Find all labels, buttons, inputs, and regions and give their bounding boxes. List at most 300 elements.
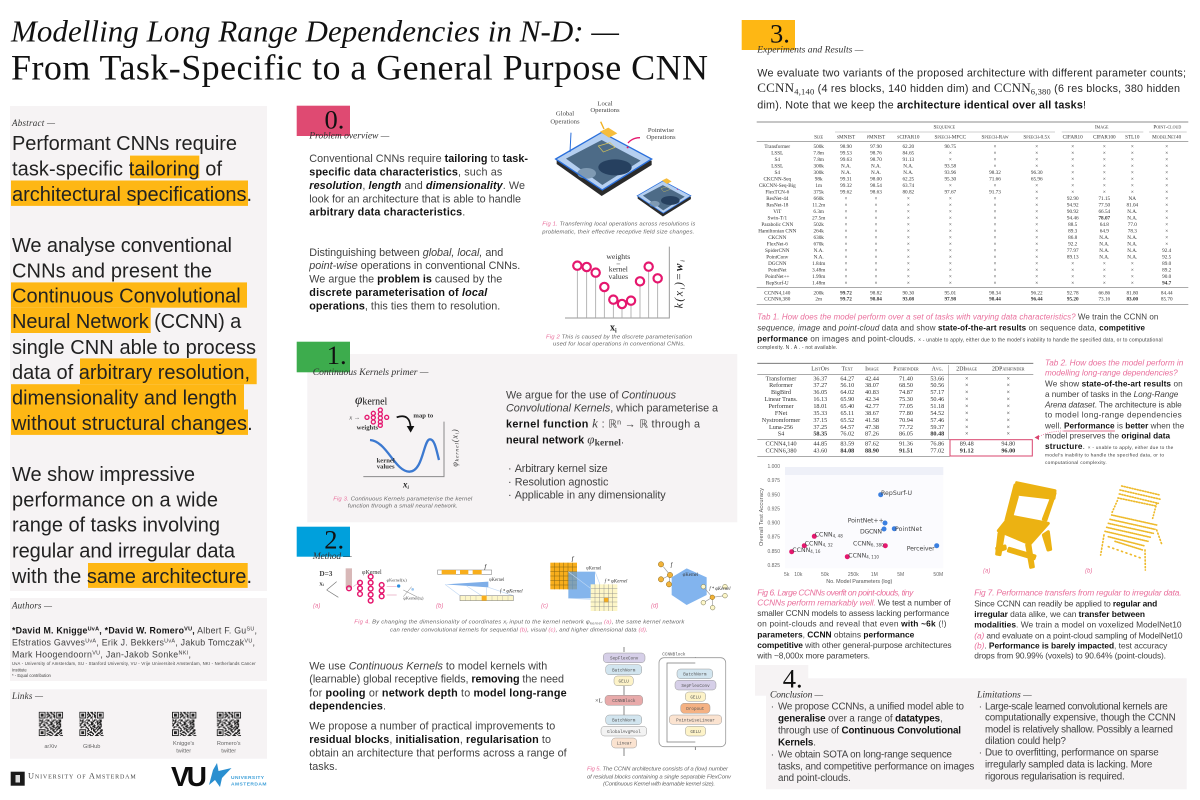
table 1 rows: 500k bbox=[814, 144, 824, 150]
table 1 CCNN rows: CCNN6,380 bbox=[764, 297, 791, 303]
figure 6 caption: competitive with other general-purpose architectures bbox=[757, 640, 952, 650]
figure 3: kernel network diagram: i bbox=[455, 432, 460, 434]
figure 4 panel letters bbox=[313, 603, 658, 609]
table 1 rows: 89.2 bbox=[1162, 267, 1172, 273]
table 2 rows: × bbox=[1007, 382, 1010, 389]
outer block frame bbox=[659, 658, 726, 747]
author names: *David M. Knigge bbox=[12, 625, 87, 635]
section 4: conclusion and limitations bbox=[755, 663, 1187, 789]
table 1 rows: × bbox=[994, 274, 997, 280]
method text: We propose a number of practical improvements to bbox=[309, 720, 555, 732]
table 2 header: ListOps bbox=[811, 367, 829, 373]
author names: UvA bbox=[164, 639, 175, 645]
table 1 rows: × bbox=[1035, 241, 1038, 247]
table 1 rows: × bbox=[875, 222, 878, 228]
table 1 rows: 84.65 bbox=[902, 150, 915, 156]
abstract text: performance on a wide bbox=[12, 489, 218, 511]
abstract text: We show impressive bbox=[12, 464, 195, 486]
point labels: RepSurf-U bbox=[881, 490, 912, 497]
method text: for pooling or network depth to model long-range bbox=[309, 687, 567, 699]
bullet list bbox=[508, 463, 666, 502]
QR captions: Romero's bbox=[217, 741, 241, 747]
badge 2 bbox=[297, 527, 350, 557]
table 1 rows: N.A. bbox=[903, 170, 913, 176]
table 1 rows: × bbox=[994, 157, 997, 163]
table 1 CCNN rows: 83.00 bbox=[1126, 297, 1139, 303]
table 2 rows: 42.77 bbox=[865, 403, 879, 410]
table 1 rows: × bbox=[875, 280, 878, 286]
table 2 rows: 56.10 bbox=[840, 382, 854, 389]
point labels: PointNet bbox=[895, 526, 923, 533]
table 2 CCNN rows: 89.48 bbox=[960, 441, 974, 448]
abstract text: range of tasks involving bbox=[12, 515, 220, 537]
logo: VU Amsterdam: VU bbox=[171, 761, 207, 792]
table 1 rows: × bbox=[949, 280, 952, 286]
intro text: dim). Note that we keep the architecture identical over all tasks! bbox=[757, 99, 1086, 111]
heading: Experiments and Results — bbox=[756, 45, 864, 56]
table 1 caption: sequence, image and point-cloud data and show state-of-the-art results on sequence data, competitive bbox=[757, 323, 1146, 332]
figure 7 caption: Since CCNN can readily be applied to regular and bbox=[974, 598, 1157, 608]
abstract heading: Abstract — bbox=[11, 118, 56, 128]
x axis ticks bbox=[784, 572, 943, 578]
table 1 rows: × bbox=[1071, 183, 1074, 189]
paragraph: tailoring: specific data characteristics, such as bbox=[309, 166, 503, 178]
right stack labels: SepFlexConv bbox=[681, 684, 710, 689]
figure 4 caption: (a), the same kernel network bbox=[604, 619, 684, 625]
table 1 rows: × bbox=[845, 254, 848, 260]
table 2 rows: Nystromformer bbox=[762, 417, 800, 424]
table 1 rows: × bbox=[875, 254, 878, 260]
table 2 caption: model preserves the original data bbox=[1045, 432, 1170, 441]
table 1 rows: Swin-T/1 bbox=[767, 215, 787, 221]
table 2 rows: × bbox=[1007, 403, 1010, 410]
kernel function text: We argue for the use of Continuous bbox=[506, 389, 677, 401]
table 1 rows: × bbox=[1035, 157, 1038, 163]
table 1 rows: × bbox=[994, 183, 997, 189]
table 1 rows: 77.0 bbox=[1128, 222, 1137, 228]
table 2 rows: S4 bbox=[778, 431, 784, 438]
panel a network: φKernel bbox=[362, 570, 382, 576]
table 1 rows: × bbox=[994, 241, 997, 247]
table 1 rows: 99.63 bbox=[840, 157, 852, 163]
table 1 rows: NA bbox=[1129, 196, 1136, 202]
limitations list: model is relatively shallow. Possibly a learned bbox=[985, 725, 1173, 736]
point labels: CCNN bbox=[853, 540, 871, 547]
table 2 rows: 64.02 bbox=[840, 389, 854, 396]
figure 6 caption: Fig 6. Large CCNNs overfit on point-clouds, tiny bbox=[757, 587, 914, 597]
table 1 rows: Hamiltonian CNN bbox=[758, 228, 797, 234]
table 1 rows: × bbox=[845, 202, 848, 208]
author names: , Erik J. Bekkers bbox=[96, 638, 165, 648]
panel d graph: f * φKernel bbox=[709, 587, 731, 592]
left stack blocks bbox=[601, 653, 647, 748]
table 1 CCNN rows: 90.30 bbox=[902, 290, 915, 296]
table 1 rows: × bbox=[1103, 176, 1106, 182]
table 1 CCNN rows: 95.01 bbox=[944, 290, 957, 296]
table 1 rows: × bbox=[949, 202, 952, 208]
table 2 rows: 47.38 bbox=[865, 424, 879, 431]
figure 7 panel letters bbox=[983, 569, 1092, 575]
author names: NKI bbox=[178, 651, 189, 657]
figure 5: CCNN architecture bbox=[595, 647, 726, 756]
table 2 header: Image bbox=[865, 367, 879, 373]
table 1 rows: 98.32 bbox=[989, 170, 1001, 176]
table 1 rows: 98.63 bbox=[870, 189, 882, 195]
table 1 CCNN rows: 81.80 bbox=[1126, 290, 1139, 296]
table 1 rows: × bbox=[994, 150, 997, 156]
table 1 rows: × bbox=[1131, 164, 1134, 170]
left stack labels: ×L bbox=[595, 697, 603, 704]
links heading: Links — bbox=[11, 691, 44, 701]
figure 2: discrete kernel plot: values bbox=[609, 272, 628, 281]
table 1 rows: 92.4 bbox=[1162, 248, 1172, 254]
table 1 rows: × bbox=[949, 228, 952, 234]
table 1 rows: 65.96 bbox=[1031, 176, 1043, 182]
table 1 rows: 93.58 bbox=[944, 164, 957, 170]
author names: SU bbox=[246, 626, 254, 632]
author names: , bbox=[253, 638, 255, 648]
table 1 rows: N.A. bbox=[1127, 254, 1137, 260]
table 1 rows: N.A. bbox=[903, 164, 913, 170]
y axis ticks: 0.975 bbox=[767, 478, 780, 484]
table 1 rows: SpiderCNN bbox=[765, 248, 790, 254]
table 2 CCNN rows: CCNN6,380 bbox=[765, 448, 797, 455]
point labels: CCNN bbox=[792, 547, 810, 554]
table 1 rows: × bbox=[875, 196, 878, 202]
table 1 CCNN rows: 200k bbox=[814, 290, 824, 296]
table 1 rows: ResNet-18 bbox=[766, 202, 789, 208]
abstract text: Neural Network (CCNN) a bbox=[12, 311, 242, 333]
table 2 rows bbox=[762, 375, 1010, 438]
paragraph: problem: We argue the problem is caused by the bbox=[309, 274, 502, 286]
paragraph: tailoring: resolution, length and dimensionality. We bbox=[309, 180, 525, 192]
table 2 rows: 86.05 bbox=[899, 431, 913, 438]
abstract text: with the same architecture. bbox=[11, 566, 252, 588]
table 1 rows: ResNet-44 bbox=[766, 196, 789, 202]
table 1 rows: 98k bbox=[815, 176, 823, 182]
figure 5 caption: (Continuous Kernel with learnable kernel size). bbox=[603, 782, 715, 788]
bullet list: Applicable in any dimensionality bbox=[515, 490, 666, 502]
figure 3: kernel network diagram: x → bbox=[348, 414, 360, 421]
figure 7 caption: (b). Performance is barely impacted, test accuracy bbox=[974, 641, 1168, 651]
table 1 rows: × bbox=[994, 202, 997, 208]
point labels: CCNN bbox=[805, 541, 823, 548]
column headers: STL10 bbox=[1125, 135, 1140, 141]
authors heading: Authors — bbox=[11, 600, 53, 610]
table 1 rows: 98.76 bbox=[870, 150, 882, 156]
table 1 rows: × bbox=[949, 215, 952, 221]
affiliations: UvA - University of Amsterdam, SU - Stanford University, VU - Vrije Universiteit Amsterdam, NKI - Netherlands Cancer bbox=[12, 661, 256, 666]
table 2 CCNN rows: 44.85 bbox=[813, 441, 827, 448]
abstract text: without structural changes. bbox=[11, 413, 253, 435]
table 2 header: Text bbox=[842, 367, 854, 373]
table 2 caption: to model long-range dependencies bbox=[1045, 411, 1182, 420]
conclusion list: generalise over a range of datatypes, bbox=[778, 713, 943, 724]
figure 3: kernel network diagram: kernel bbox=[454, 443, 460, 461]
table 1 rows: CKCNN-Seq-Big bbox=[759, 183, 796, 189]
conclusion list bbox=[771, 701, 974, 784]
table 1 rows: × bbox=[907, 267, 910, 273]
title line 1: Modelling Long Range Dependencies in N-D: — bbox=[10, 14, 619, 49]
table 2 rows: 75.30 bbox=[899, 396, 913, 403]
table 1 rows: × bbox=[1035, 202, 1038, 208]
table 1 rows: × bbox=[907, 261, 910, 267]
section 0: problem overview bbox=[297, 101, 695, 348]
table 1 rows: × bbox=[1035, 189, 1038, 195]
group headers: Point-cloud bbox=[1153, 125, 1181, 131]
table 1 rows: 1.84m bbox=[812, 261, 825, 267]
abstract highlights bbox=[11, 156, 257, 588]
abstract text bbox=[11, 133, 256, 588]
figure 3: kernel network diagram: φ bbox=[355, 392, 363, 407]
figure 7: chair point clouds bbox=[997, 483, 1162, 570]
table 1 rows: × bbox=[1071, 274, 1074, 280]
table 1 rows: × bbox=[1035, 222, 1038, 228]
column headers: Speech-MFCC bbox=[934, 135, 967, 141]
table 1 rows: × bbox=[949, 261, 952, 267]
panel b sequence bbox=[438, 564, 523, 601]
panel a network bbox=[319, 568, 424, 603]
left stack labels: GlobalAvgPool bbox=[607, 730, 641, 735]
table 1 rows: 94.92 bbox=[1067, 202, 1079, 208]
number 0: 0. bbox=[324, 104, 344, 134]
table 1 rows: 78.3 bbox=[1128, 228, 1137, 234]
table 1 rows: × bbox=[1071, 144, 1074, 150]
limitations list bbox=[979, 701, 1176, 782]
table 1 rows: × bbox=[1035, 280, 1038, 286]
table 1 rows: N.A. bbox=[1127, 248, 1137, 254]
table 1 rows: × bbox=[1165, 215, 1168, 221]
conclusion list: · bbox=[771, 749, 774, 760]
table 1 CCNN rows: 2m bbox=[815, 297, 822, 303]
table 1 rows: N.A. bbox=[1099, 241, 1109, 247]
author names: , bbox=[189, 650, 191, 660]
QR captions: arXiv bbox=[44, 744, 57, 750]
intro text: CCNN bbox=[757, 80, 795, 95]
limitations list: Due to overfitting, performance on sparse bbox=[985, 747, 1159, 758]
table 2 rows: 59.37 bbox=[930, 424, 944, 431]
table 1 rows: N.A. bbox=[871, 164, 881, 170]
abstract text: CNNs and present the bbox=[12, 260, 212, 282]
table 1 rows: × bbox=[1103, 183, 1106, 189]
logo: University of Amsterdam: University of Amsterdam bbox=[28, 771, 136, 780]
table 1 rows: S4 bbox=[775, 157, 780, 163]
table 1 CCNN rows: 98.34 bbox=[989, 290, 1001, 296]
logo: VU Amsterdam: UNIVERSITY bbox=[231, 775, 265, 781]
table 1 rows: × bbox=[1131, 157, 1134, 163]
point labels: DGCNN bbox=[860, 529, 882, 536]
author names: , *David W. Romero bbox=[99, 625, 185, 635]
author names: , Jakub Tomczak bbox=[175, 638, 245, 648]
table 1 rows: LSSL bbox=[771, 150, 783, 156]
table 1 rows: × bbox=[1165, 170, 1168, 176]
table 1 rows: 91.73 bbox=[989, 189, 1001, 195]
table 1 rows: × bbox=[845, 267, 848, 273]
figure 1 caption: problematic, their effective receptive field size changes. bbox=[541, 229, 694, 235]
logo: University of Amsterdam bbox=[11, 771, 136, 786]
table 2 caption: modelling long-range dependencies? bbox=[1045, 369, 1178, 378]
table 1 rows: × bbox=[1103, 157, 1106, 163]
figure 2: discrete kernel plot: k(x bbox=[674, 291, 686, 308]
figure 3 caption: function through a small neural network. bbox=[348, 504, 458, 510]
table 1 rows: DGCNN bbox=[768, 261, 787, 267]
table 2 rows: 53.66 bbox=[930, 375, 944, 382]
table 2 rows: 70.94 bbox=[899, 417, 913, 424]
table 1 rows: N.A. bbox=[1099, 248, 1109, 254]
table 1 rows: N.A. bbox=[1127, 215, 1137, 221]
point labels: PointNet++ bbox=[848, 518, 884, 525]
intro text: 4,140 bbox=[794, 86, 814, 96]
table 1 rows: × bbox=[1071, 150, 1074, 156]
panel: abstract bbox=[10, 106, 267, 591]
left stack labels: GELU bbox=[619, 680, 629, 684]
table 2 rows: 76.02 bbox=[840, 431, 854, 438]
table 1 rows: × bbox=[994, 280, 997, 286]
y axis ticks: 1.000 bbox=[767, 464, 780, 470]
point labels: 4, 32 bbox=[823, 543, 833, 548]
table 1 rows: × bbox=[1165, 150, 1168, 156]
table 1 rows: × bbox=[1131, 183, 1134, 189]
table 1 rows: 81.04 bbox=[1126, 202, 1139, 208]
table 1 CCNN rows bbox=[764, 290, 1173, 303]
figure 3: kernel network diagram: kernel bbox=[362, 397, 388, 408]
table 1 rows: × bbox=[1131, 261, 1134, 267]
table 1 rows: × bbox=[1035, 267, 1038, 273]
table 1 rows: × bbox=[1165, 176, 1168, 182]
bullet list: Arbitrary kernel size bbox=[515, 463, 608, 475]
table 2 rows: × bbox=[965, 424, 968, 431]
section 1: continuous kernels primer bbox=[297, 340, 737, 522]
figure 6 caption bbox=[756, 587, 952, 660]
kernel function text: neural network φ bbox=[506, 431, 594, 446]
table 1 rows: 375k bbox=[814, 189, 824, 195]
limitations list: dilation could help? bbox=[985, 736, 1067, 747]
table 1 rows: PointConv bbox=[766, 254, 789, 260]
table 1 rows: N.A. bbox=[871, 170, 881, 176]
table 1 rows: × bbox=[875, 228, 878, 234]
figure 3: kernel network diagram: (x bbox=[450, 435, 459, 442]
paragraph: problem: discrete parameterisation of local bbox=[309, 287, 488, 299]
table 1 rows: × bbox=[1103, 170, 1106, 176]
kernel function text: → ℝ through a bbox=[621, 418, 700, 430]
table 1 rows: 264k bbox=[814, 228, 824, 234]
figure 3: kernel network diagram: x bbox=[403, 480, 408, 490]
table 1 rows: Transformer bbox=[764, 143, 790, 150]
figure 2: discrete kernel plot bbox=[565, 247, 686, 334]
table 1 rows: × bbox=[1165, 157, 1168, 163]
table 2 CCNN rows: 94.80 bbox=[1001, 441, 1015, 448]
figure 2: discrete kernel plot: weights bbox=[606, 252, 630, 261]
limitations heading: Limitations — bbox=[976, 689, 1032, 700]
figure 1: resolution diagram bbox=[550, 101, 691, 217]
paragraph: problem: operations, this ties them to resolution. bbox=[309, 300, 500, 312]
table 1 rows: × bbox=[1165, 164, 1168, 170]
table 2 header: Pathfinder bbox=[893, 367, 919, 373]
table 1 rows: × bbox=[1103, 144, 1106, 150]
table 1 rows: 98.54 bbox=[870, 183, 882, 189]
table 1 rows: 92.5 bbox=[1162, 254, 1172, 260]
table 1 rows: × bbox=[949, 235, 952, 241]
table 1 rows: 1.48m bbox=[812, 280, 825, 286]
table 1 rows: × bbox=[875, 267, 878, 273]
figure 6 caption: CCNNs perform remarkably well. We test a number of bbox=[757, 598, 951, 608]
table 1 rows: 630k bbox=[814, 235, 824, 241]
table 1 CCNN rows: 98.84 bbox=[870, 297, 882, 303]
panel a network: xᵢ bbox=[319, 581, 325, 588]
column headers: ModelNet40 bbox=[1152, 135, 1182, 141]
figure 2 caption bbox=[546, 334, 693, 348]
table 1 rows: × bbox=[1165, 241, 1168, 247]
table 2 rows: 42.34 bbox=[865, 396, 879, 403]
abstract text: architectural specifications. bbox=[12, 184, 252, 206]
conclusion heading: Conclusion — bbox=[770, 689, 823, 700]
heading: Problem overview — bbox=[308, 130, 390, 141]
column headers: Speech-Raw bbox=[981, 135, 1009, 141]
column headers: CIFAR10 bbox=[1063, 135, 1083, 141]
table 1 rows: 90.75 bbox=[944, 144, 957, 150]
abstract text: regular and irregular data bbox=[12, 540, 236, 562]
figure 2 caption: used for local operations in conventional CNNs. bbox=[553, 342, 685, 348]
figure 5 caption: Fig 5. The CCNN architecture consists of a (low) number bbox=[587, 767, 729, 773]
table 2 header: 2DImage bbox=[956, 367, 978, 373]
table 1 rows: × bbox=[1165, 183, 1168, 189]
title bbox=[10, 14, 708, 87]
table 2 rows: × bbox=[1007, 417, 1010, 424]
conclusion list: We obtain SOTA on long-range sequence bbox=[778, 749, 953, 760]
kernel function text: n bbox=[617, 419, 621, 426]
table 1 rows: Parabolic CNN bbox=[761, 222, 793, 228]
author names: Efstratios Gavves bbox=[12, 638, 85, 648]
left stack labels: SepFlexConv bbox=[610, 656, 639, 662]
table 2 rows: 38.07 bbox=[865, 382, 879, 389]
column headers: sCIFAR10 bbox=[897, 135, 920, 141]
table 2 rows: 41.58 bbox=[865, 417, 879, 424]
table 1 rows: × bbox=[1071, 157, 1074, 163]
table 1 rows: × bbox=[1131, 274, 1134, 280]
table 1 rows: × bbox=[907, 248, 910, 254]
table 1 rows: 99.31 bbox=[840, 176, 852, 182]
table 1 CCNN rows: 97.98 bbox=[944, 297, 957, 303]
table 1 rows: × bbox=[1165, 235, 1168, 241]
table 2 CCNN rows: 43.60 bbox=[813, 448, 827, 455]
table 1 rows: × bbox=[907, 196, 910, 202]
figure 4 caption bbox=[354, 619, 685, 633]
figure 3 caption bbox=[333, 496, 473, 510]
table 1 rows: S4 bbox=[775, 170, 780, 176]
table 1 rows: × bbox=[949, 254, 952, 260]
table 1 rows: × bbox=[994, 228, 997, 234]
column headers: CIFAR100 bbox=[1093, 135, 1116, 141]
table 1 rows: × bbox=[949, 241, 952, 247]
chair b point cloud bbox=[1101, 486, 1162, 570]
y axis ticks: 0.875 bbox=[767, 535, 780, 541]
table 2 rows: × bbox=[965, 431, 968, 438]
table 2 CCNN rows: 88.90 bbox=[865, 448, 879, 455]
table 1 CCNN rows: 98.82 bbox=[870, 290, 882, 296]
paragraph: tailoring: Conventional CNNs require tailoring to task- bbox=[309, 153, 528, 165]
right stack labels: GELU bbox=[690, 695, 701, 700]
table 1 CCNN rows: 95.20 bbox=[1067, 297, 1079, 303]
table 1 rows: × bbox=[994, 248, 997, 254]
table 1 rows: × bbox=[949, 183, 952, 189]
table 1 CCNN rows: 66.86 bbox=[1098, 290, 1111, 296]
badge 4 bbox=[755, 665, 808, 696]
panel: links bbox=[10, 689, 267, 759]
paragraph: problem: point-wise operations in conventional CNNs. bbox=[308, 260, 520, 272]
table 1 CCNN rows: 84.44 bbox=[1161, 290, 1173, 296]
table 1 rows: 6.3m bbox=[813, 209, 824, 215]
table 2 caption bbox=[1044, 359, 1185, 466]
